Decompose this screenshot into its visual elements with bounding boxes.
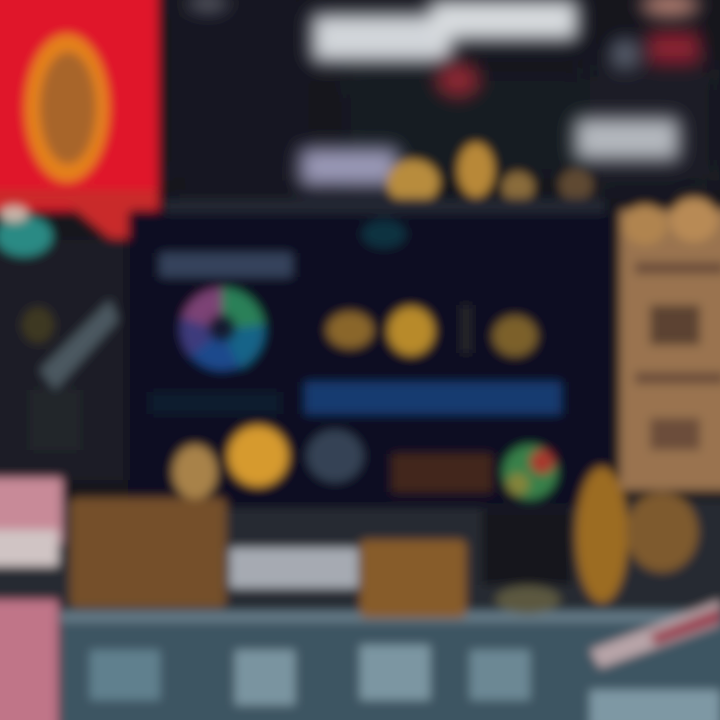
bar: blue progress [305,382,561,414]
panel: monitor dashboard [128,198,610,508]
coins row: monitor [327,305,537,356]
icon: top teal dot [362,220,406,248]
box: large brown stack [70,498,226,608]
panel: white label [575,118,679,160]
icon: small gold coin [173,445,217,499]
panel: red poster [0,0,158,238]
top right details [188,0,700,97]
pen: pink and white [590,600,720,668]
coins: right stack [496,467,698,614]
icon: large gold coin [228,426,288,486]
desk [0,478,720,720]
coins row: top [387,143,593,204]
text block: lavender label [300,148,398,186]
panel: brick coin stack right [620,198,720,490]
chart: donut [180,288,264,370]
icon: orange ring [25,34,109,182]
box: middle brown stack [360,540,466,618]
bars: red-brown [392,454,492,492]
panel: left dark chart [0,206,125,480]
dark object [482,510,572,585]
panel: top white banner [312,0,578,62]
monitor top rim [165,198,605,214]
text block: faint labels [150,392,280,414]
heading: dashboard title [160,253,292,277]
icon: grey circle [307,430,363,482]
icon: multicolour mark [503,445,557,499]
